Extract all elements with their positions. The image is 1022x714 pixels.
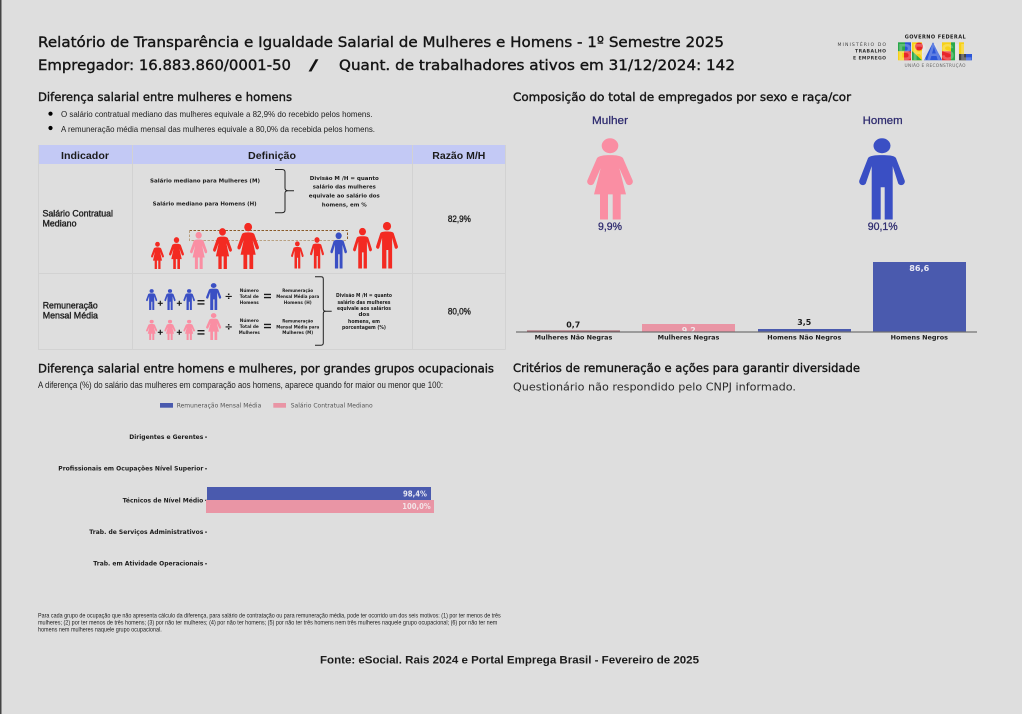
formula: women: Número xyxy=(240,317,259,324)
bar chart: sexo e raça/cor: 3,5 xyxy=(797,318,812,327)
footnote: mulheres; (2) por ter menos de três homens; (3) por não ter mulheres; (4) por não ter homens; (5) por não ter três homens nem três mulheres naquele grupo ocupacional; (6) por não ter nem xyxy=(38,619,498,626)
footnote xyxy=(38,612,501,634)
bar chart: grupos ocupacionais xyxy=(58,433,434,568)
row: remuneração mensal média: porcentagem (%) xyxy=(342,325,386,331)
formula: men xyxy=(146,283,319,310)
logo: ministério e governo federal: GOVERNO FEDERAL xyxy=(905,34,967,40)
footnote: homens nem mulheres naquele grupo ocupacional. xyxy=(38,627,162,634)
formula: women: Remuneração xyxy=(282,319,313,325)
formula: women xyxy=(146,313,319,340)
icon: mulher: Mulher xyxy=(592,115,628,127)
formula: women: Mulheres xyxy=(239,330,260,336)
row: remuneração mensal média: Remuneração xyxy=(43,301,98,311)
panel: composição do total de empregados xyxy=(513,90,977,341)
row: salário contratual mediano xyxy=(42,170,471,269)
row: salário contratual mediano: Salário mediano para Homens (H) xyxy=(153,201,257,208)
bar chart: grupos ocupacionais: Técnicos de Nível Médio xyxy=(123,496,204,504)
panel: grandes grupos ocupacionais xyxy=(38,361,501,634)
bar chart: grupos ocupacionais: Trab. de Serviços Administrativos xyxy=(89,528,203,536)
row: salário contratual mediano: equivale ao salário dos xyxy=(309,193,380,200)
legend xyxy=(160,401,373,409)
row: salário contratual mediano: Salário Contratual xyxy=(42,209,113,219)
logo: ministério e governo federal: UNIÃO E RECONSTRUÇÃO xyxy=(904,62,966,69)
title: Quant. de trabalhadores ativos em 31/12/2024: 142 xyxy=(339,58,735,74)
title xyxy=(38,35,735,74)
formula: men: Homens xyxy=(240,300,259,306)
bar chart: sexo e raça/cor: 86,6 xyxy=(909,264,930,273)
bar chart: sexo e raça/cor: 9,2 xyxy=(682,326,696,335)
heading: Critérios de remuneração e ações para garantir diversidade xyxy=(513,361,860,375)
bullet list: A remuneração média mensal das mulheres equivale a 80,0% da recebida pelos homens. xyxy=(61,124,375,134)
source line: Fonte: eSocial. Rais 2024 e Portal Emprega Brasil - Fevereiro de 2025 xyxy=(320,654,699,666)
table header: Razão M/H xyxy=(432,151,485,162)
title: Relatório de Transparência e Igualdade Salarial de Mulheres e Homens - 1º Semestre 2025 xyxy=(38,35,724,51)
bar chart: grupos ocupacionais: Profissionais em Ocupações Nível Superior xyxy=(58,465,204,473)
bar chart: grupos ocupacionais: Dirigentes e Gerentes xyxy=(129,433,203,441)
title: / xyxy=(309,58,318,74)
row: salário contratual mediano: salário das mulheres xyxy=(313,184,376,191)
bar chart: sexo e raça/cor: Mulheres Negras xyxy=(658,333,719,341)
logo: ministério e governo federal: BRASIL xyxy=(898,39,972,65)
icon: mulher: 9,9% xyxy=(598,221,622,233)
text block: Questionário não respondido pelo CNPJ informado. xyxy=(513,381,796,394)
row: salário contratual mediano: 82,9% xyxy=(448,214,471,225)
formula: men: Total de xyxy=(240,294,259,300)
legend: Remuneração Mensal Média xyxy=(177,401,261,409)
bar chart: sexo e raça/cor: Homens Negros xyxy=(891,333,948,341)
icon: homem xyxy=(859,115,905,233)
bar chart: grupos ocupacionais: 100,0% xyxy=(402,502,431,511)
heading: Composição do total de empregados por sexo e raça/cor xyxy=(513,90,851,104)
row: remuneração mensal média: Divisão M /H = quanto xyxy=(336,293,392,299)
formula: women: ÷ xyxy=(225,322,233,333)
bullet list xyxy=(48,109,375,134)
title: Empregador: 16.883.860/0001-50 xyxy=(38,58,291,74)
bar chart: sexo e raça/cor: 0,7 xyxy=(566,320,580,329)
bullet list: O salário contratual mediano das mulheres equivale a 82,9% do recebido pelos homens. xyxy=(61,109,372,119)
table header xyxy=(38,145,506,164)
formula: women: Total de xyxy=(240,324,259,330)
icons: row of men xyxy=(291,222,398,268)
formula: women: Mensal Média para xyxy=(276,324,319,331)
icon: homem: 90,1% xyxy=(868,221,898,233)
row: salário contratual mediano: homens, em % xyxy=(322,203,367,209)
row: remuneração mensal média: equivale aos salários xyxy=(337,305,391,312)
row: remuneração mensal média: 80,0% xyxy=(448,306,471,317)
bar chart: sexo e raça/cor: Homens Não Negros xyxy=(767,333,841,341)
formula: women: Mulheres (M) xyxy=(282,330,313,336)
row: remuneração mensal média: Mensal Média xyxy=(43,311,98,321)
table header: Indicador xyxy=(61,151,109,162)
heading: Diferença salarial entre mulheres e homens xyxy=(38,90,292,104)
row: salário contratual mediano: Salário mediano para Mulheres (M) xyxy=(150,178,260,185)
panel: critérios de remuneração xyxy=(513,361,860,394)
formula: men: Remuneração xyxy=(282,288,313,294)
icon: mulher xyxy=(587,115,633,233)
footnote: Para cada grupo de ocupação que não apresenta cálculo da diferença, para salário de contratação ou para remuneração média, pode ter ocorrido um dos seis motivos: (1) por ter menos de três xyxy=(38,612,501,619)
panel: diferença salarial entre mulheres e homens xyxy=(38,90,506,350)
row: remuneração mensal média: salário das mulheres xyxy=(338,299,391,306)
heading: Diferença salarial entre homens e mulheres, por grandes grupos ocupacionais xyxy=(38,361,494,375)
row: remuneração mensal média: homens, em xyxy=(348,319,380,325)
formula: men: Mensal Média para xyxy=(276,293,319,300)
bar chart: sexo e raça/cor: Mulheres Não Negras xyxy=(535,333,612,341)
logo: ministério e governo federal: E EMPREGO xyxy=(853,56,886,62)
table header: Definição xyxy=(248,151,296,162)
row: remuneração mensal média: dos xyxy=(358,312,370,318)
bar chart: sexo e raça/cor xyxy=(516,262,977,341)
subheading: A diferença (%) do salário das mulheres em comparação aos homens, aparece quando for maior ou menor que 100: xyxy=(38,380,443,390)
bar chart: grupos ocupacionais: 98,4% xyxy=(403,489,427,498)
logo: ministério e governo federal xyxy=(838,34,972,69)
formula: men: Número xyxy=(240,287,259,294)
logo: ministério e governo federal: TRABALHO xyxy=(855,49,886,55)
icons: row of women xyxy=(151,223,259,269)
icon: homem: Homem xyxy=(863,115,903,127)
formula: men: ÷ xyxy=(225,292,233,302)
row: salário contratual mediano: Mediano xyxy=(42,218,76,228)
formula: men: Homens (H) xyxy=(284,300,312,306)
legend: Salário Contratual Mediano xyxy=(291,401,373,409)
row: salário contratual mediano: Divisão M /H = quanto xyxy=(310,176,379,182)
row: remuneração mensal média xyxy=(43,277,471,345)
table xyxy=(38,145,506,350)
logo: ministério e governo federal: MINISTÉRIO DO xyxy=(838,40,886,48)
bar chart: grupos ocupacionais: Trab. em Atividade Operacionais xyxy=(93,560,203,568)
